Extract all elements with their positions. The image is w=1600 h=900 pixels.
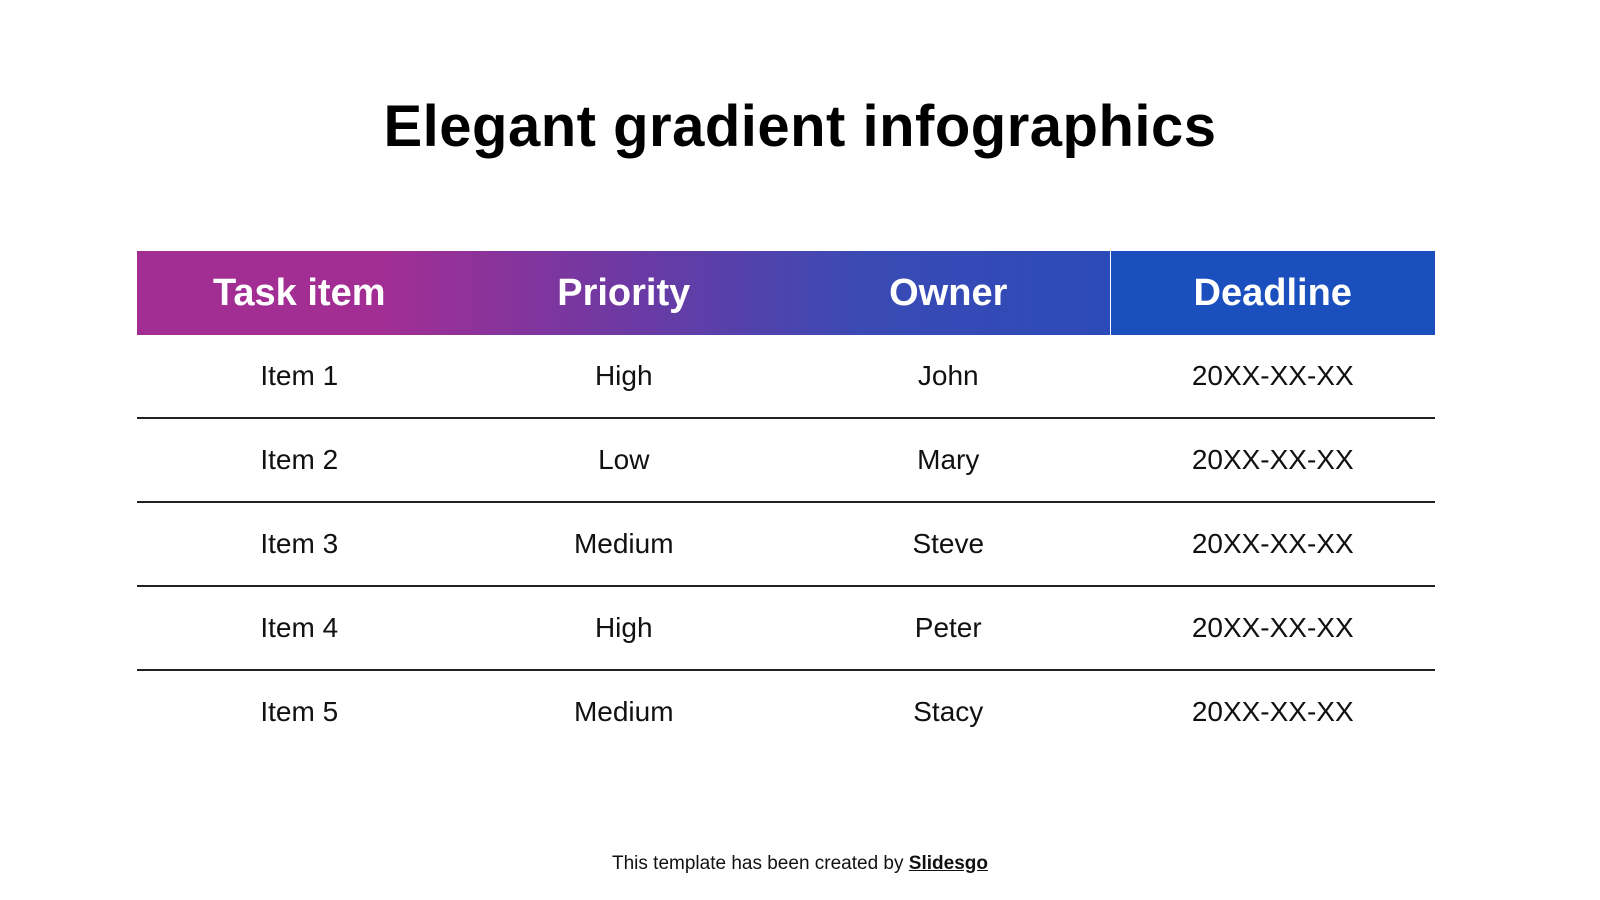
footer credit: This template has been created by Slidesgo	[612, 853, 988, 874]
row 5: Item 5	[260, 696, 338, 727]
row 3: 20XX-XX-XX	[1192, 528, 1354, 559]
header row	[137, 251, 1435, 335]
row 5	[260, 696, 1354, 727]
row 3: Steve	[912, 528, 984, 559]
row 4: Peter	[915, 612, 982, 643]
row 2	[137, 419, 1435, 503]
row 5: Stacy	[913, 696, 983, 727]
row 4	[137, 587, 1435, 671]
row 3: Medium	[574, 528, 674, 559]
row 2: 20XX-XX-XX	[1192, 444, 1354, 475]
row 3	[137, 503, 1435, 587]
row 1	[137, 335, 1435, 419]
table	[137, 251, 1435, 727]
row 2: Low	[598, 444, 649, 475]
row 3: Item 3	[260, 528, 338, 559]
row 1: High	[595, 360, 653, 391]
header row: Priority	[557, 272, 690, 314]
row 5: Medium	[574, 696, 674, 727]
row 5: 20XX-XX-XX	[1192, 696, 1354, 727]
row 1: 20XX-XX-XX	[1192, 360, 1354, 391]
header row: Deadline	[1194, 272, 1352, 314]
row 4: Item 4	[260, 612, 338, 643]
row 4: 20XX-XX-XX	[1192, 612, 1354, 643]
title: Elegant gradient infographics	[383, 94, 1217, 159]
row 2: Item 2	[260, 444, 338, 475]
row 1: John	[918, 360, 979, 391]
row 4: High	[595, 612, 653, 643]
header row: Owner	[889, 272, 1007, 314]
row 1: Item 1	[260, 360, 338, 391]
header row: Task item	[213, 272, 385, 314]
row 2: Mary	[917, 444, 979, 475]
